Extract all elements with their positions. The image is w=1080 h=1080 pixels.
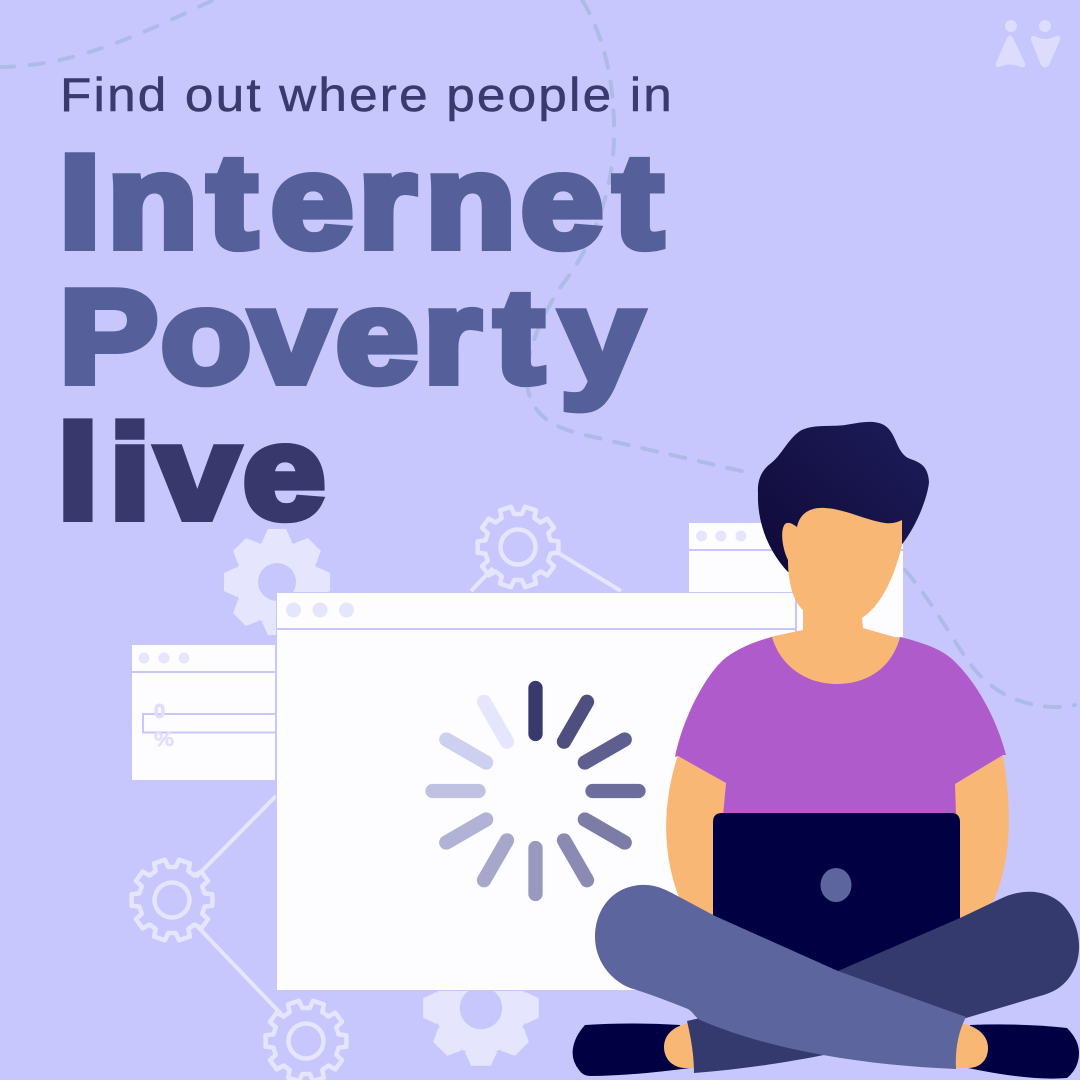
back leg bbox=[687, 892, 1079, 1073]
heading line: Internet: Internet bbox=[59, 127, 663, 275]
logo: two figures bbox=[996, 20, 1060, 68]
icon: outline gear bottom bbox=[266, 999, 346, 1080]
dashed path: top left bbox=[0, 0, 213, 67]
window: large loading bbox=[276, 592, 797, 991]
shirt bbox=[675, 637, 1006, 815]
right arm bbox=[955, 755, 1009, 925]
front leg bbox=[595, 885, 966, 1069]
dashed path: centre bbox=[527, 0, 750, 473]
left arm bbox=[666, 755, 726, 930]
left shoe bbox=[573, 1024, 690, 1076]
heading line: Poverty: Poverty bbox=[59, 262, 643, 410]
icon: outline gear upper bbox=[478, 505, 558, 589]
hair bbox=[758, 422, 929, 572]
icon: solid gear top bbox=[224, 529, 330, 635]
window: back right bbox=[689, 523, 903, 637]
window: small left with progress bbox=[132, 645, 276, 780]
icon: loading spinner bbox=[432, 688, 638, 894]
left foot bbox=[664, 1023, 698, 1068]
laptop bbox=[713, 813, 960, 985]
progress value: 0 bbox=[154, 701, 165, 723]
heading line: live: live bbox=[57, 398, 325, 546]
progress percent: % bbox=[154, 729, 174, 751]
progress bar bbox=[143, 714, 276, 732]
icon: solid gear bottom bbox=[423, 950, 539, 1066]
icon: outline gear left bbox=[132, 858, 212, 942]
connector lines bbox=[196, 551, 621, 1018]
right shoe bbox=[968, 1024, 1079, 1079]
dashed path: right bbox=[905, 570, 1075, 707]
subheading: Find out where people in bbox=[60, 68, 674, 121]
person illustration bbox=[573, 422, 1079, 1079]
face and neck bbox=[770, 508, 905, 695]
right foot bbox=[952, 1023, 988, 1068]
laptop logo bbox=[820, 868, 852, 902]
